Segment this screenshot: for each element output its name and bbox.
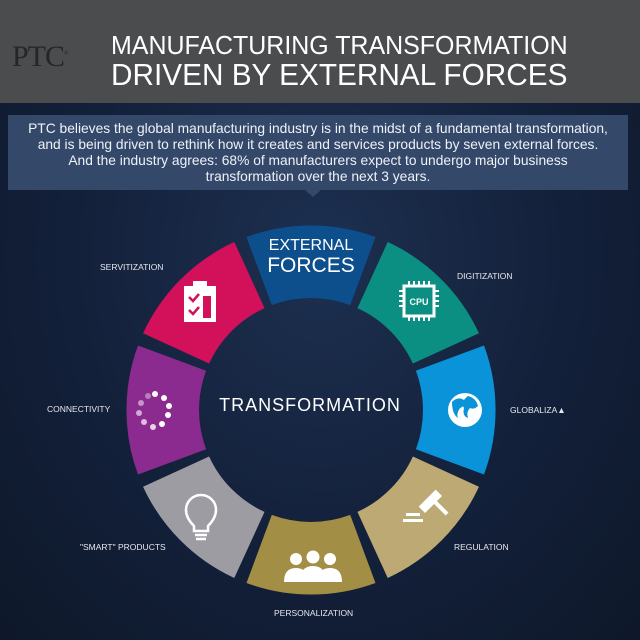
icon: cpu — [399, 281, 439, 321]
segment: external forces: FORCES — [267, 254, 355, 277]
segment: regulation — [340, 439, 487, 586]
title: DRIVEN BY EXTERNAL FORCES — [111, 57, 567, 92]
logo: PTC® — [12, 40, 68, 73]
icon: gavel — [403, 490, 448, 522]
label: globalization: GLOBALIZA▲ — [510, 405, 566, 415]
icon: loading dots — [136, 391, 172, 430]
icon: people — [284, 550, 342, 582]
segment: personalization — [246, 515, 376, 595]
intro text box: and is being driven to rethink how it creates and services products by seven external forces. — [38, 137, 598, 152]
segment: connectivity — [126, 346, 206, 474]
label: digitization: DIGITIZATION — [457, 271, 513, 281]
icon: cpu: CPU — [409, 297, 429, 307]
intro text box: PTC believes the global manufacturing industry is in the midst of a fundamental transformation, — [28, 121, 608, 136]
label: regulation: REGULATION — [454, 542, 509, 552]
pointer — [305, 190, 321, 197]
icon: globe — [448, 393, 482, 427]
title — [111, 30, 568, 92]
intro text box — [8, 115, 628, 190]
intro text box: And the industry agrees: 68% of manufacturers expect to undergo major business — [68, 153, 568, 168]
segment: smart products — [135, 439, 282, 586]
label: smart products: "SMART" PRODUCTS — [80, 542, 166, 552]
segment: external forces: EXTERNAL — [269, 237, 353, 254]
segment: digitization — [340, 234, 487, 381]
label: personalization: PERSONALIZATION — [274, 608, 353, 618]
segment: globalization — [416, 346, 496, 474]
label: servitization: SERVITIZATION — [100, 262, 163, 272]
icon: bulb — [186, 495, 216, 539]
header — [0, 0, 640, 103]
center label: TRANSFORMATION — [219, 395, 401, 415]
label: connectivity: CONNECTIVITY — [47, 404, 110, 414]
title: MANUFACTURING TRANSFORMATION — [111, 30, 568, 60]
segment: external forces — [246, 225, 376, 305]
icon: clipboard — [184, 281, 216, 322]
intro text box: transformation over the next 3 years. — [206, 169, 430, 184]
segment: servitization — [135, 234, 282, 381]
